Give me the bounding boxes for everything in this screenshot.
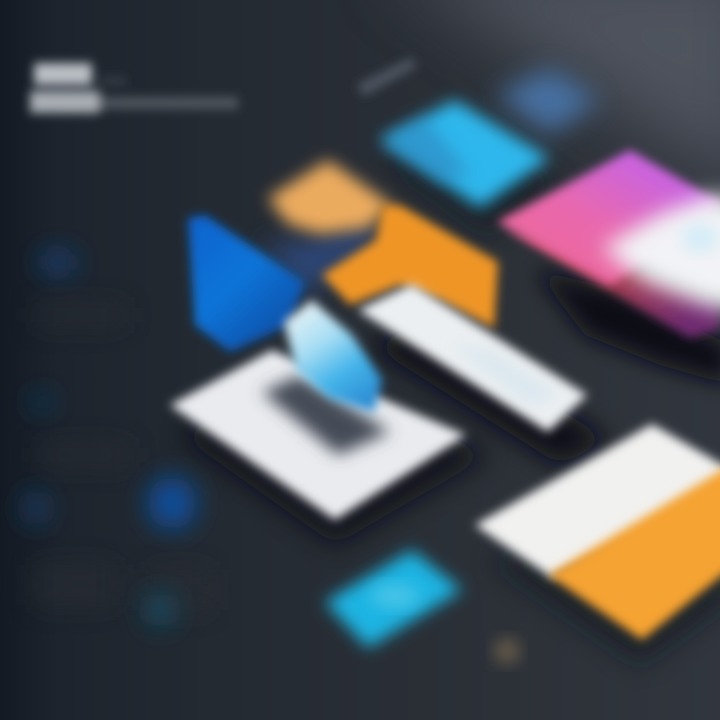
card: faint blue top xyxy=(495,68,600,135)
card shadow xyxy=(535,270,720,385)
card: cyan bottom xyxy=(325,550,462,648)
icon: small orange dot xyxy=(494,638,520,664)
card top: white xyxy=(475,424,720,578)
card: blue xyxy=(188,215,305,352)
card: orange xyxy=(268,160,498,328)
card side: red band xyxy=(505,228,720,338)
left blue dots xyxy=(24,251,196,626)
card bottom: orange xyxy=(548,462,720,640)
background top glow xyxy=(380,0,720,190)
orange light blob xyxy=(268,160,392,234)
card: white and orange bottom right xyxy=(475,424,720,665)
card face: pink xyxy=(497,150,720,285)
sidebar text smudges xyxy=(35,305,210,610)
card face: white xyxy=(602,194,720,312)
card: dark blue behind orange xyxy=(262,218,378,295)
faint top line smudge xyxy=(357,58,418,96)
card: pink and purple xyxy=(497,150,720,385)
card: cyan top xyxy=(380,100,558,234)
card shadow xyxy=(490,500,720,665)
card: white tablet xyxy=(170,350,490,545)
heading smudge xyxy=(30,63,238,113)
icon: light blue curved form xyxy=(284,300,382,412)
card: white strip xyxy=(358,284,610,465)
card face: light blue spot xyxy=(682,224,718,252)
orange main xyxy=(322,205,498,328)
